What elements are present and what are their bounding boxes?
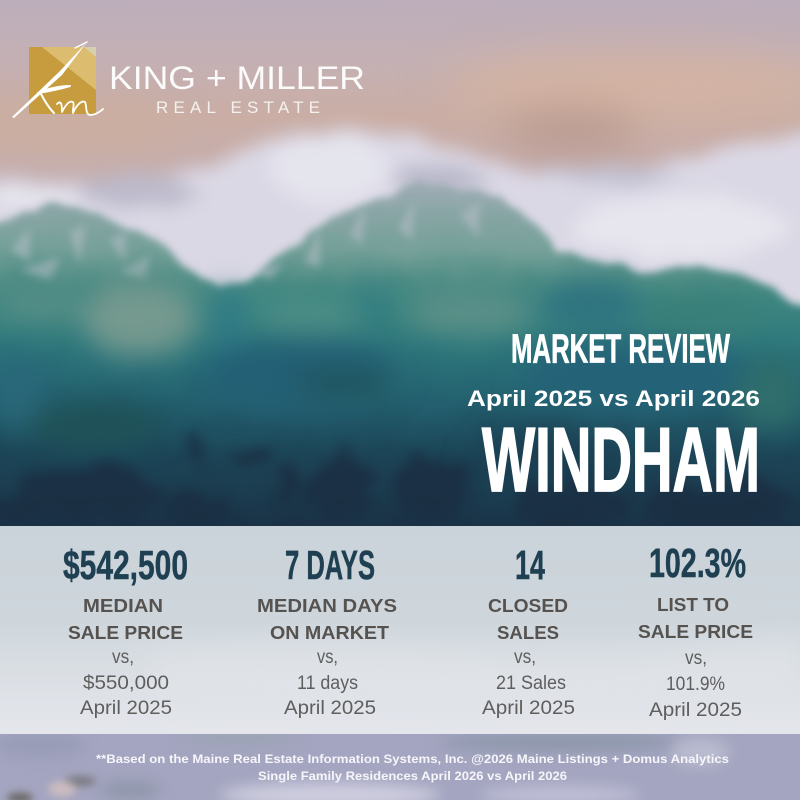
wave lobes and teal shading [0, 279, 800, 510]
sea foam [0, 126, 800, 340]
stat: list to sale price: vs, [685, 648, 707, 669]
stat: list to sale price: April 2025 [649, 700, 742, 721]
stat: median days on market [257, 542, 397, 719]
footnote: Single Family Residences April 2026 vs April 2026 [258, 769, 567, 783]
stat: list to sale price: 101.9% [666, 674, 725, 695]
panel: statistics band [0, 526, 800, 734]
stat: closed sales: 21 Sales [496, 673, 566, 694]
stat: list to sale price: 102.3% [649, 540, 746, 586]
logo tagline: REAL ESTATE [156, 98, 320, 117]
stat: closed sales: April 2025 [482, 698, 575, 719]
stat: closed sales [482, 542, 575, 719]
stat: list to sale price: SALE PRICE [638, 622, 753, 642]
foam streaks on wave crests [10, 200, 480, 280]
dark water blotches [0, 430, 800, 528]
stat: median days on market: vs, [317, 647, 338, 668]
stat: median sale price: SALE PRICE [68, 623, 183, 643]
subtitle: date comparison: April 2025 vs April 2026 [467, 386, 760, 411]
stat: median sale price [63, 542, 188, 719]
footer background [0, 720, 800, 800]
stat: closed sales: vs, [514, 647, 536, 668]
stat: list to sale price [638, 540, 753, 721]
footnote: **Based on the Maine Real Estate Information Systems, Inc. @2026 Maine Listings + Domus Analytics [96, 752, 729, 766]
background: blurred ocean wave photo [0, 0, 800, 560]
footnote [96, 752, 729, 783]
stat: median sale price: $550,000 [83, 673, 169, 694]
logo wordmark: KING + MILLER [109, 60, 365, 96]
stat: median days on market: 7 DAYS [285, 542, 375, 588]
stat: list to sale price: LIST TO [657, 595, 729, 615]
logo: King + Miller [12, 42, 365, 118]
icon: gold square with km signature [12, 42, 103, 118]
stat: median sale price: $542,500 [63, 542, 188, 588]
stat: closed sales: 14 [515, 542, 545, 588]
stat: median days on market: MEDIAN DAYS [257, 596, 397, 616]
stat: median sale price: MEDIAN [83, 596, 163, 616]
stat: closed sales: SALES [497, 623, 559, 643]
stat: closed sales: CLOSED [488, 596, 568, 616]
wave body [0, 182, 800, 560]
stat: median sale price: vs, [112, 647, 134, 668]
stat: median days on market: ON MARKET [270, 623, 389, 643]
stat: median days on market: 11 days [297, 673, 358, 694]
stat: median days on market: April 2025 [284, 698, 376, 719]
stat: median sale price: April 2025 [80, 698, 172, 719]
